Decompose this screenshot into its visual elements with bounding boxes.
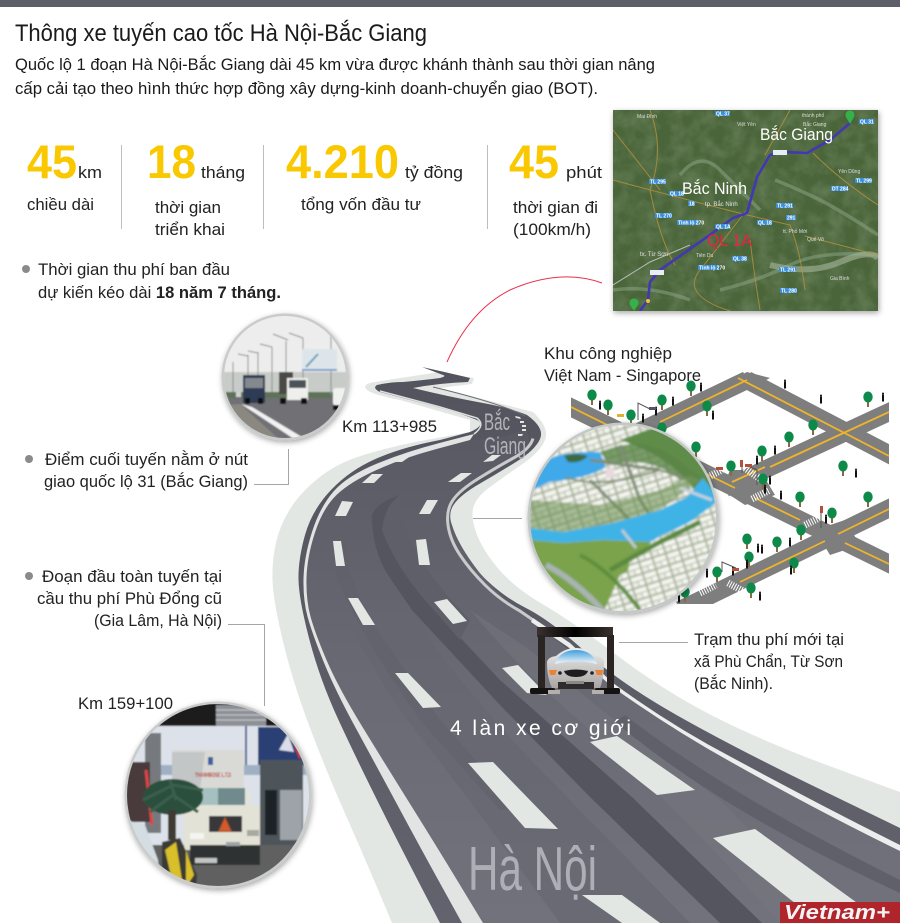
connector line to industrial park: [473, 518, 522, 520]
map of route: 291: [787, 216, 796, 222]
traffic lights: [617, 403, 823, 572]
map of route: TL 295: [650, 180, 666, 186]
trees: [587, 380, 873, 602]
map of route: TL 280: [781, 288, 797, 294]
map of route: Tỉnh lộ 270: [678, 220, 704, 226]
connector line: end of route: [254, 449, 288, 484]
bullet: start of route: [25, 567, 222, 630]
map of route: QL 18: [758, 220, 772, 226]
map of route: [613, 110, 878, 311]
label: new toll station: [694, 630, 844, 693]
photo circle: Km 113+985 trucks: [223, 314, 348, 442]
stat: travel time: (100km/h): [513, 220, 591, 239]
car: [547, 648, 604, 694]
map of route: Bắc Giang: [803, 121, 827, 128]
intro text: Quốc lộ 1 đoạn Hà Nội-Bắc Giang dài 45 km vừa được khánh thành sau thời gian nâng: [15, 55, 655, 74]
icon: toll gate with car: [530, 627, 620, 694]
road label: Bắc Giang: [484, 409, 526, 460]
road label: Hà Nội: Hà Nội: [468, 835, 597, 904]
road: [272, 367, 900, 923]
map of route: Mai Đình: [637, 114, 657, 120]
bullet: start of route: (Gia Lâm, Hà Nội): [94, 611, 222, 630]
map of route: QL 31: [860, 120, 874, 126]
connector line: start of route: [228, 624, 264, 706]
map of route: QL 1A: [707, 231, 753, 250]
photo circle: Km 159+100 toll gate: THANHBOSE L.T.D: [195, 772, 231, 779]
map of route: Tỉnh lộ 270: [699, 266, 725, 272]
road label: Bắc Giang: Bắc: [484, 409, 510, 436]
photo circle: industrial park: [529, 424, 720, 620]
map of route: QL 1A: [716, 224, 731, 230]
stat: duration: triển khai: [155, 220, 225, 239]
stat: duration: thời gian: [155, 198, 221, 217]
intro text: [15, 55, 655, 98]
map of route: Yên Dũng: [838, 169, 860, 175]
crosswalks: [700, 468, 825, 593]
photo circle: Km 159+100 toll gate: [126, 703, 312, 890]
stat: length: 45: [27, 135, 77, 188]
stat: travel time: phút: [566, 163, 602, 182]
map of route: Tiên Du: [696, 253, 714, 259]
map of route: TL 299: [856, 178, 872, 184]
label: new toll station: (Bắc Ninh).: [694, 674, 773, 693]
bullet: end of route: [25, 450, 248, 491]
stat: travel time: [509, 135, 602, 239]
map of route: tx. Từ Sơn: [640, 252, 669, 258]
isometric roads: [560, 372, 900, 610]
label: new toll station: xã Phù Chẩn, Từ Sơn: [694, 652, 843, 671]
bullet: end of route: giao quốc lộ 31 (Bắc Giang): [44, 472, 248, 491]
top bar: [0, 0, 900, 7]
bullet: start of route: cầu thu phí Phù Đổng cũ: [37, 589, 222, 608]
map of route: tp. Bắc Ninh: [705, 201, 738, 208]
map of route: Bắc Giang: [760, 125, 833, 144]
map of route: 18: [689, 202, 695, 208]
label: Km 159+100: Km 159+100: [78, 694, 173, 713]
map of route: TL 270: [656, 214, 672, 220]
stat: duration: tháng: [201, 163, 245, 182]
pedestrians: [599, 380, 884, 602]
bullet: toll period: Thời gian thu phí ban đầu: [38, 260, 230, 279]
stat: investment: 4.210: [286, 135, 399, 188]
title: Thông xe tuyến cao tốc Hà Nội-Bắc Giang: [15, 20, 427, 47]
stat: travel time: 45: [509, 135, 559, 188]
stat: duration: [147, 135, 245, 239]
bullet: end of route: Điểm cuối tuyến nằm ở nút: [45, 450, 248, 469]
stat: length: chiều dài: [27, 195, 94, 214]
stat: investment: tổng vốn đầu tư: [301, 195, 421, 214]
map of route: QL 37: [716, 112, 730, 118]
stat: investment: tỷ đồng: [405, 163, 463, 182]
map of route: tt. Phố Mới: [783, 229, 807, 235]
road label: Bắc Giang: Giang: [484, 433, 526, 460]
bullet: toll period: dự kiến kéo dài 18 năm 7 tháng.: [38, 283, 281, 302]
map of route: QL 18: [670, 192, 684, 198]
label: industrial park: [544, 344, 701, 385]
road label: lanes: 4 làn xe cơ giới: [450, 717, 634, 740]
map of route: TL 291: [777, 204, 793, 210]
bullet: toll period: [22, 260, 281, 302]
map of route: QL 38: [733, 256, 747, 262]
label: industrial park: Khu công nghiệp: [544, 344, 672, 363]
stat: length: km: [78, 163, 102, 182]
stat: travel time: thời gian đi: [513, 198, 598, 217]
map of route: Quế Võ: [807, 237, 824, 243]
label: new toll station: Trạm thu phí mới tại: [694, 630, 844, 649]
map of route: thành phố: [802, 113, 824, 119]
bullet: start of route: Đoạn đầu toàn tuyến tại: [42, 567, 222, 586]
label: industrial park: Việt Nam - Singapore: [544, 366, 701, 385]
intro text: cấp cải tạo theo hình thức hợp đồng xây dựng-kinh doanh-chuyển giao (BOT).: [15, 79, 598, 98]
connector line: toll station: [619, 642, 688, 644]
map of route: Bắc Ninh: [682, 179, 747, 198]
map of route: Việt Yên: [737, 122, 756, 128]
stat: length: [27, 135, 102, 214]
stat: duration: 18: [147, 135, 196, 188]
label: Km 113+985: Km 113+985: [342, 417, 437, 436]
arrow: red arc to map: [447, 277, 602, 362]
lane dashes: [333, 416, 860, 923]
map of route: Gia Bình: [830, 276, 850, 282]
map of route: DT 284: [832, 186, 849, 192]
stat: investment: [286, 135, 463, 214]
map of route: TL 291: [780, 268, 796, 274]
